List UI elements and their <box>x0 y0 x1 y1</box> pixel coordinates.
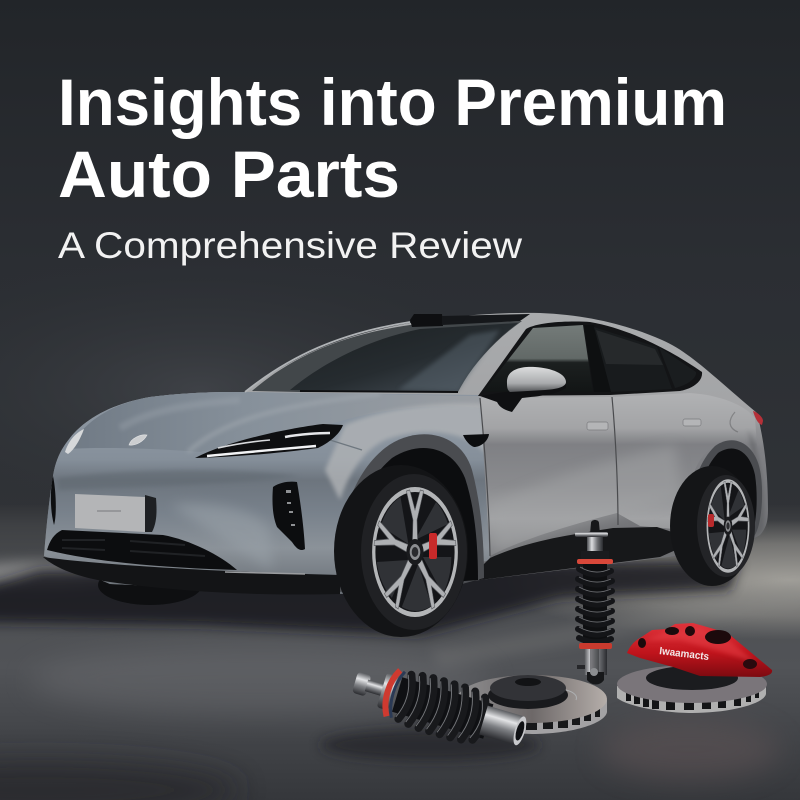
rear panel shade <box>748 430 764 540</box>
title: Auto Parts <box>58 137 400 211</box>
far front wheel <box>98 565 202 605</box>
chrome cylinder <box>479 706 524 745</box>
standing coilover shock <box>575 520 613 684</box>
caliper lettering: Iwaamacts <box>659 645 710 663</box>
fender highlight <box>325 403 487 500</box>
quarter window <box>659 347 696 388</box>
shock lower red ring <box>579 643 612 649</box>
front lower bumper lip <box>43 557 340 594</box>
title <box>58 65 727 211</box>
window frame <box>478 322 702 396</box>
license plate recess <box>145 495 157 532</box>
license plate <box>75 494 145 532</box>
red ring <box>381 669 400 716</box>
sill trim <box>470 527 687 580</box>
hood badge <box>129 435 147 445</box>
red brake caliper <box>627 623 772 677</box>
pillar <box>584 325 611 392</box>
subtitle: A Comprehensive Review <box>58 225 522 266</box>
shock top red ring <box>577 559 613 564</box>
headlight <box>195 424 343 458</box>
side air intake <box>272 482 305 550</box>
left headlight tip <box>65 429 84 454</box>
hood and front fascia <box>44 392 490 594</box>
front side window <box>483 325 593 392</box>
lying spring coils <box>397 672 491 745</box>
background floor <box>0 505 800 800</box>
shock foot <box>587 672 604 684</box>
background wall <box>0 0 800 540</box>
lying coilover shock <box>348 657 532 757</box>
shock core <box>583 563 607 648</box>
rear side window <box>594 327 672 392</box>
fascia crease shadow <box>58 470 300 490</box>
car shadow on floor <box>0 560 740 635</box>
title: Insights into Premium <box>58 65 727 139</box>
door handle rear <box>683 419 701 426</box>
tail light <box>753 411 763 425</box>
front grille edge <box>51 476 56 525</box>
shock chrome body <box>584 649 607 675</box>
roof camera <box>410 314 443 327</box>
side mirror <box>480 367 566 412</box>
shock upper mount <box>590 520 600 534</box>
windshield <box>252 321 522 392</box>
front arch and wheel <box>334 434 484 637</box>
car body <box>44 313 768 594</box>
front grille <box>47 530 237 570</box>
fascia highlight near fender <box>170 504 272 570</box>
hood surface <box>68 392 482 452</box>
brake disc 2 <box>617 665 767 713</box>
door surfaces <box>480 393 758 556</box>
rear arch and wheel <box>670 440 762 586</box>
door seams <box>330 397 738 556</box>
core <box>392 677 493 739</box>
car <box>43 313 768 637</box>
chrome end <box>352 671 372 697</box>
brake disc 1 <box>457 675 607 734</box>
shock spring coils <box>578 569 612 642</box>
fender vent <box>463 434 489 447</box>
door handle front <box>587 422 608 430</box>
